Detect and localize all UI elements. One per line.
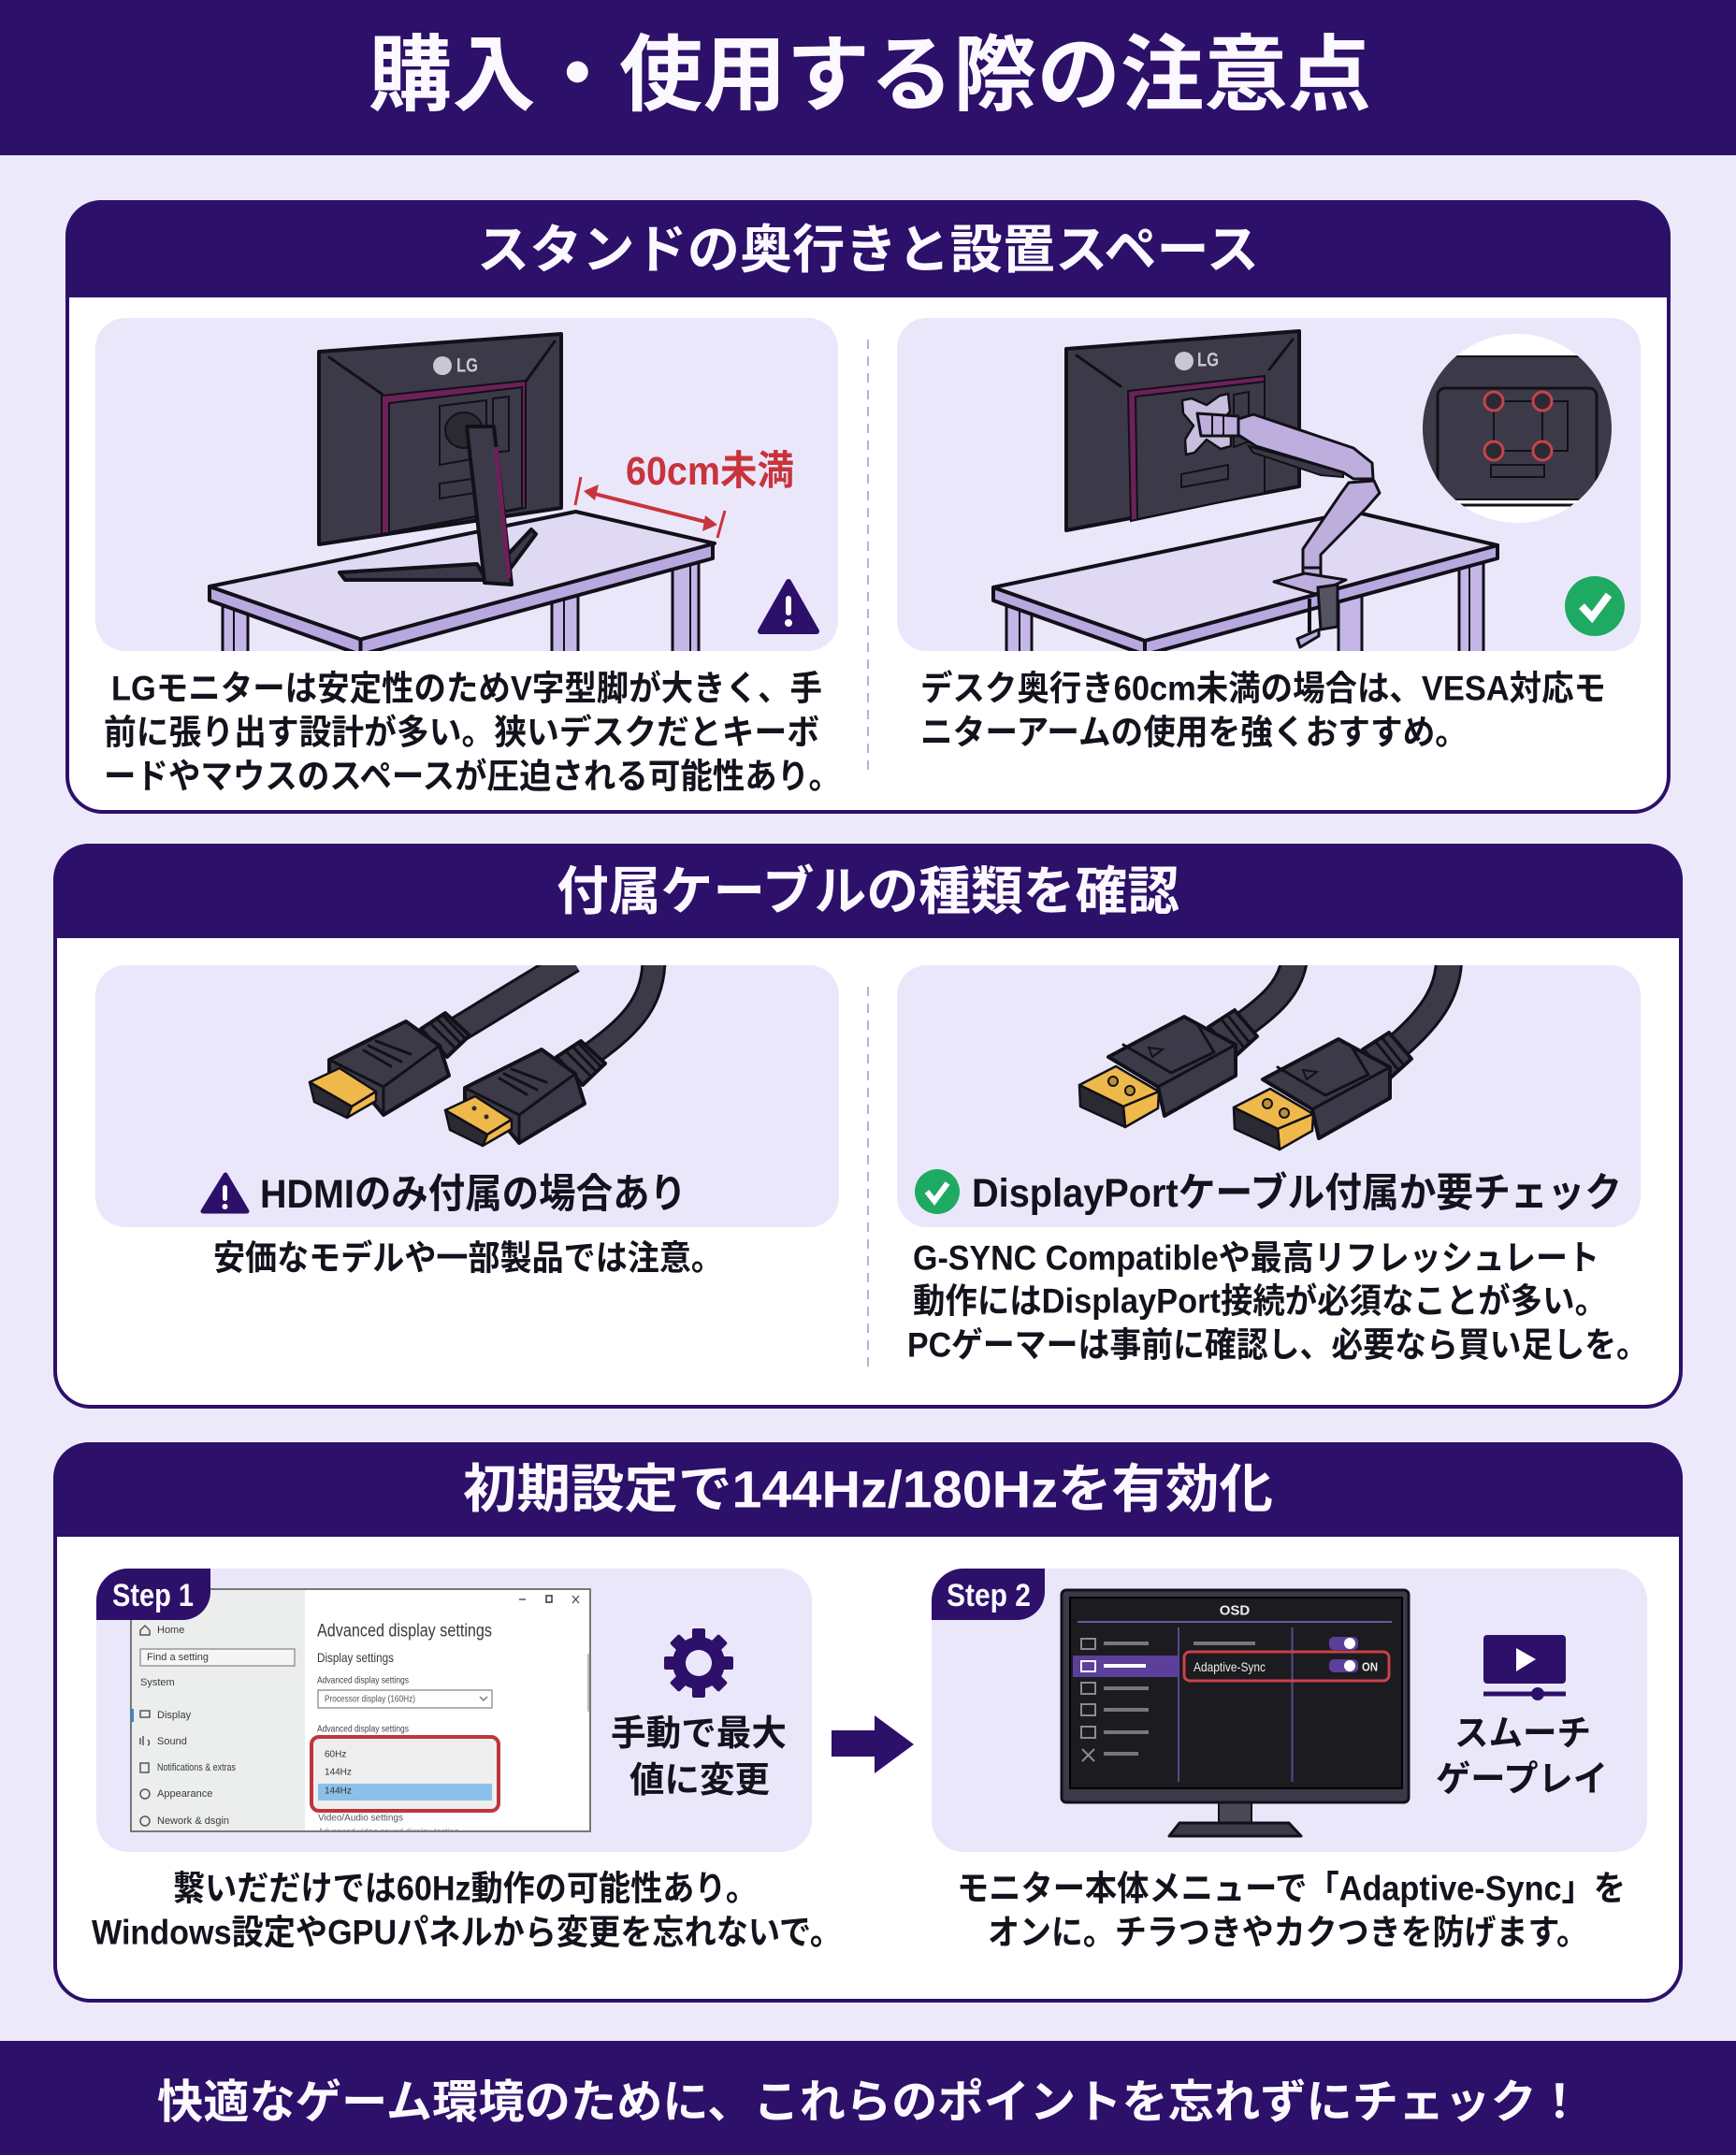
monitor arm and clamp — [1197, 413, 1380, 647]
card: step 2 — [932, 1569, 1647, 1852]
icon: warning triangle — [760, 582, 817, 631]
screenshot: Windows display settings — [131, 1589, 590, 1836]
text: left stand note: ードやマウスのスペースが圧迫される可能性あり。 — [104, 758, 841, 795]
tag: Step 1: Step 1 — [112, 1578, 194, 1613]
highlighted refresh rate list — [311, 1737, 499, 1811]
text: step 2 note: オンに。チラつきやカクつきを防げます。 — [988, 1914, 1588, 1951]
title banner: 購入・使用する際の注意点 — [369, 28, 1371, 122]
label: under 60cm: 60cm未満 — [626, 449, 794, 494]
screenshot: Windows display settings: Sound — [157, 1736, 187, 1747]
monitor with OSD menu: OSD — [1220, 1603, 1250, 1618]
screenshot: Windows display settings: Advanced display settings — [317, 1725, 409, 1734]
screenshot: Windows display settings: Advanced video sound display testing — [318, 1827, 459, 1836]
panel heading: stand depth: スタンドの奥行きと設置スペース — [477, 221, 1259, 279]
screenshot: Windows display settings: Find a setting — [147, 1652, 209, 1663]
panel: stand depth and desk space — [65, 200, 1671, 812]
screenshot: Windows display settings: Advanced display settings — [317, 1676, 409, 1685]
label: smooth gameplay — [1436, 1714, 1608, 1800]
highlighted refresh rate list: 60Hz — [325, 1749, 346, 1760]
tag: Step 1 — [96, 1569, 210, 1620]
screenshot: Windows display settings: Notifications & extras — [157, 1762, 236, 1773]
screenshot: Windows display settings: Display settings — [317, 1650, 394, 1665]
tag: Step 2: Step 2 — [947, 1578, 1031, 1613]
text: left stand note: 前に張り出す設計が多い。狭いデスクだとキーボ — [104, 713, 819, 752]
label: smooth gameplay: ゲープレイ — [1436, 1760, 1608, 1800]
title banner — [0, 0, 1736, 155]
monitor back — [319, 334, 561, 544]
text: step 2 note: モニター本体メニューで「Adaptive-Sync」を — [957, 1869, 1626, 1908]
screenshot: Windows display settings: Appearance — [157, 1788, 212, 1800]
panel: initial settings — [53, 1442, 1683, 2001]
screenshot: Windows display settings: Processor display (160Hz) — [325, 1695, 415, 1704]
text: step 2 note — [957, 1869, 1626, 1951]
highlighted refresh rate list: 144Hz — [325, 1786, 352, 1796]
V-shaped stand — [340, 427, 536, 585]
screenshot: Windows display settings: Display — [157, 1710, 192, 1721]
text: HDMI note: 安価なモデルや一部製品では注意。 — [213, 1238, 723, 1278]
DisplayPort connector right — [1234, 1033, 1411, 1150]
label: change to max manually — [611, 1714, 787, 1801]
panel heading: included cables: 付属ケーブルの種類を確認 — [557, 862, 1179, 920]
illustration: monitor on V-shaped stand with desk — [95, 318, 838, 655]
card: step 1 — [96, 1569, 812, 1852]
text: DisplayPort note: 動作にはDisplayPort接続が必須なことが多い。 — [913, 1281, 1607, 1321]
text: left stand note — [104, 670, 841, 795]
icon: green check — [1565, 576, 1625, 636]
HDMI connector left — [310, 1013, 470, 1118]
illustration: DisplayPort cables — [897, 959, 1641, 1227]
panel: included cables — [53, 844, 1683, 1407]
HDMI connector right — [445, 1041, 605, 1146]
footer banner — [0, 2041, 1736, 2155]
label: change to max manually: 値に変更 — [629, 1761, 770, 1801]
panel heading: initial settings — [53, 1442, 1683, 1537]
screenshot: Windows display settings: Home — [157, 1625, 184, 1636]
text: step 1 note — [92, 1869, 842, 1951]
screenshot: Windows display settings: Video/Audio settings — [318, 1813, 403, 1824]
text: step 1 note: Windows設定やGPUパネルから変更を忘れないで。 — [92, 1914, 842, 1951]
illustration: monitor on VESA arm — [897, 318, 1641, 655]
text: left stand note: LGモニターは安定性のためV字型脚が大きく、手 — [111, 670, 822, 707]
monitor back: LG — [456, 355, 478, 376]
text: DisplayPort note: G-SYNC Compatibleや最高リフレッシュレート — [913, 1238, 1599, 1278]
icon: video player — [1483, 1635, 1566, 1700]
dimension arrow — [575, 477, 725, 538]
text: step 1 note: 繋いだだけでは60Hz動作の可能性あり。 — [173, 1869, 758, 1908]
monitor with OSD menu: Adaptive-Sync — [1194, 1659, 1266, 1674]
label: check DisplayPort cable: DisplayPortケーブル付属か要チェック — [972, 1171, 1622, 1216]
text: VESA arm note: ニターアームの使用を強くおすすめ。 — [920, 713, 1468, 752]
arrow: step 1 to step 2 — [832, 1715, 914, 1773]
monitor with OSD menu: ON — [1362, 1659, 1378, 1674]
text: VESA arm note — [920, 668, 1606, 752]
panel heading: initial settings: 初期設定で144Hz/180Hzを有効化 — [463, 1459, 1273, 1519]
label: change to max manually: 手動で最大 — [611, 1714, 787, 1754]
monitor with OSD menu — [1062, 1590, 1409, 1836]
text: DisplayPort note: PCゲーマーは事前に確認し、必要なら買い足しを。 — [907, 1326, 1648, 1364]
text: DisplayPort note — [907, 1238, 1648, 1364]
icon: warning triangle small — [203, 1175, 247, 1211]
inset: VESA mounting holes — [1412, 334, 1622, 523]
panel heading: stand depth — [65, 200, 1671, 297]
illustration: HDMI cables — [95, 959, 839, 1227]
DisplayPort connector left — [1079, 1010, 1257, 1127]
monitor back with VESA plate: LG — [1197, 350, 1219, 370]
screenshot: Windows display settings: Nework & dsgin — [157, 1815, 229, 1827]
screenshot: Windows display settings: Advanced display settings — [317, 1622, 492, 1641]
icon: gear — [664, 1628, 733, 1698]
text: VESA arm note: デスク奥行き60cm未満の場合は、VESA対応モ — [920, 668, 1606, 707]
footer banner: 快適なゲーム環境のために、これらのポイントを忘れずにチェック！ — [157, 2077, 1583, 2128]
panel heading: included cables — [53, 844, 1683, 938]
highlighted refresh rate list: 144Hz — [325, 1768, 352, 1777]
monitor back with VESA plate — [1066, 331, 1299, 530]
label: HDMI only: HDMIのみ付属の場合あり — [260, 1172, 687, 1217]
screenshot: Windows display settings: System — [140, 1677, 175, 1688]
label: smooth gameplay: スムーチ — [1454, 1714, 1591, 1754]
tag: Step 2 — [932, 1569, 1045, 1620]
icon: green check small — [915, 1169, 960, 1214]
